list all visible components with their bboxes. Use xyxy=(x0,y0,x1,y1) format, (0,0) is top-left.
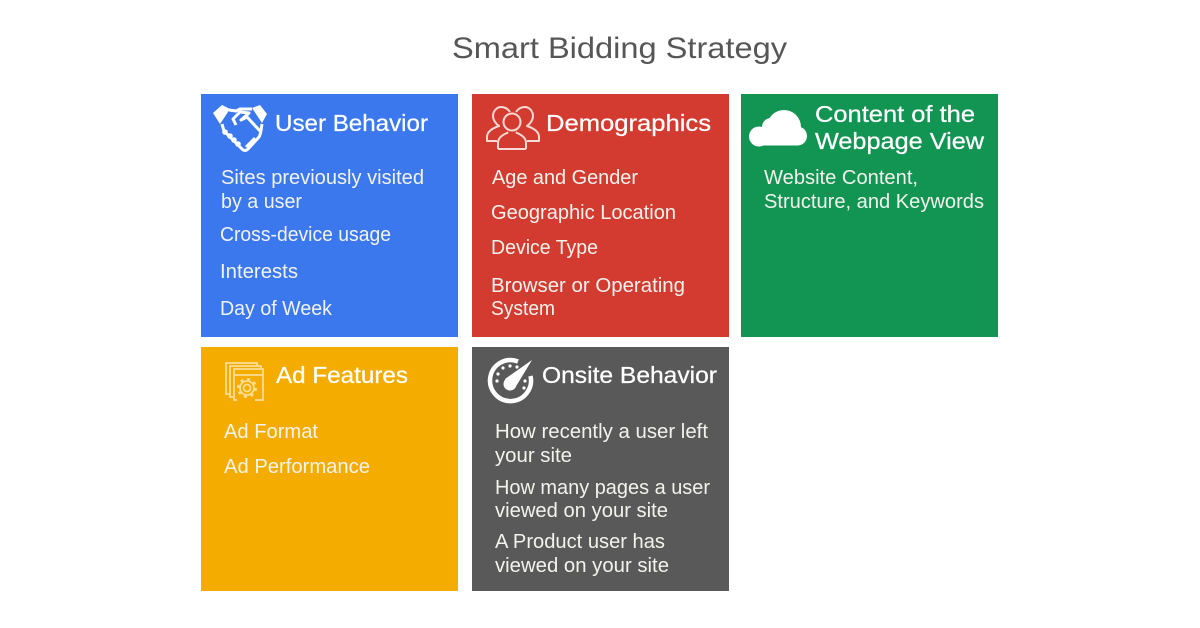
list: demographics items: Age and Gender xyxy=(492,166,638,189)
panel: content of the webpage view xyxy=(741,94,998,337)
list: onsite behavior items: your site xyxy=(495,444,572,467)
list: user behavior items: Day of Week xyxy=(220,297,333,320)
icon: cloud xyxy=(749,110,807,146)
heading: content of the webpage view: Content of the xyxy=(815,101,975,127)
list: user behavior items xyxy=(220,166,424,320)
list: onsite behavior items: A Product user has xyxy=(495,530,665,553)
list: onsite behavior items xyxy=(495,420,710,577)
panel: onsite behavior xyxy=(472,347,729,591)
title: Smart Bidding Strategy xyxy=(452,32,787,65)
panel: user behavior xyxy=(201,94,458,337)
list: demographics items: Browser or Operating xyxy=(491,274,685,297)
list: onsite behavior items: How many pages a user xyxy=(495,476,710,499)
list: content items xyxy=(764,166,984,213)
list: onsite behavior items: viewed on your site xyxy=(495,499,668,522)
list: onsite behavior items: viewed on your site xyxy=(495,554,669,577)
list: user behavior items: by a user xyxy=(221,190,302,213)
icon: ad settings windows xyxy=(226,363,263,400)
list: demographics items: Geographic Location xyxy=(491,201,676,224)
heading: onsite behavior: Onsite Behavior xyxy=(542,362,717,388)
panel: ad features xyxy=(201,347,458,591)
panel: demographics xyxy=(472,94,729,337)
list: ad features items xyxy=(224,420,370,478)
icon: people group xyxy=(487,107,539,149)
heading: content of the webpage view xyxy=(815,101,984,154)
list: content items: Structure, and Keywords xyxy=(764,190,984,213)
list: demographics items xyxy=(491,166,685,320)
heading: demographics: Demographics xyxy=(546,110,711,136)
list: ad features items: Ad Format xyxy=(224,420,318,443)
list: user behavior items: Cross-device usage xyxy=(220,223,391,246)
list: demographics items: Device Type xyxy=(491,236,598,259)
heading: ad features: Ad Features xyxy=(276,362,408,388)
list: onsite behavior items: How recently a user left xyxy=(495,420,708,443)
list: demographics items: System xyxy=(491,297,555,320)
list: user behavior items: Sites previously visited xyxy=(221,166,424,189)
icon: speedometer gauge xyxy=(490,360,532,401)
list: ad features items: Ad Performance xyxy=(224,455,370,478)
icon: handshake xyxy=(213,105,267,150)
heading: content of the webpage view: Webpage View xyxy=(815,128,984,154)
list: content items: Website Content, xyxy=(764,166,918,189)
heading: user behavior: User Behavior xyxy=(275,110,428,136)
list: user behavior items: Interests xyxy=(220,260,298,283)
